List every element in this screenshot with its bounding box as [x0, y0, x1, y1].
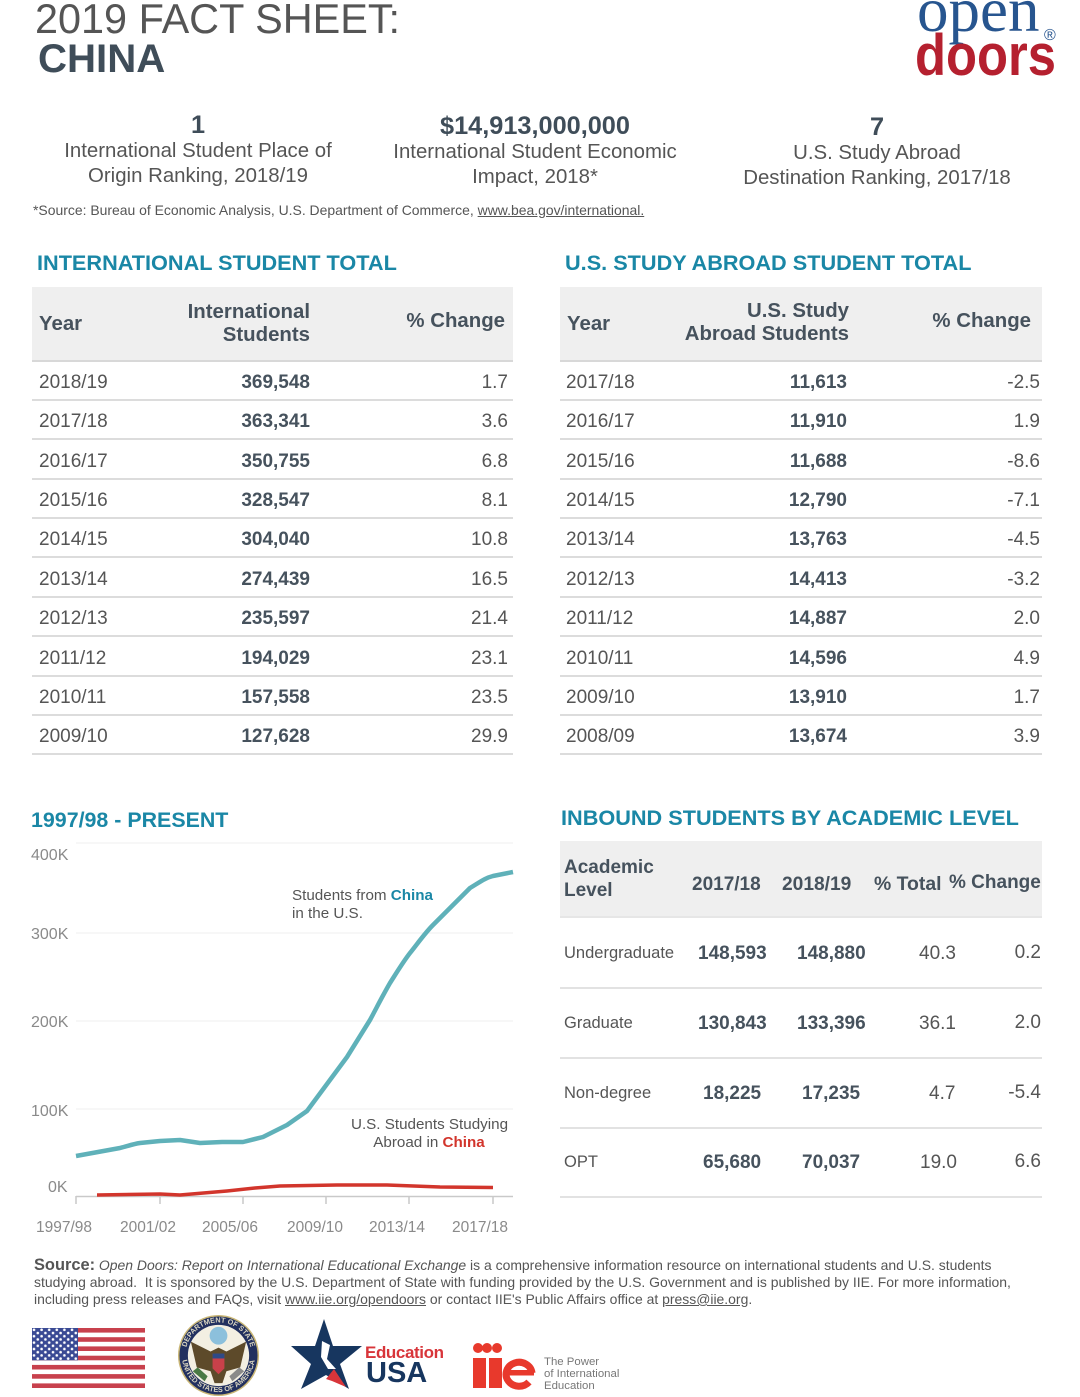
row 2009/10: 13,910: [789, 686, 847, 708]
table header: % Total: [874, 873, 942, 895]
x axis labels: 2013/14: [369, 1219, 425, 1236]
row OPT: 70,037: [802, 1152, 860, 1173]
row 2013/14: 16.5: [471, 568, 508, 590]
logo text: EducationUSA: [365, 1343, 444, 1389]
row non-degree: [560, 1058, 1042, 1128]
row 2016/17: [32, 440, 513, 480]
row 2011/12: 2011/12: [39, 648, 106, 668]
icon: Department of State seal: DEPARTMENT OF STATE: [182, 1317, 256, 1348]
row 2015/16: 8.1: [482, 490, 508, 511]
stat: study abroad ranking: 7: [870, 113, 884, 141]
row 2014/15: 2014/15: [39, 529, 108, 550]
row undergraduate: 0.2: [1015, 942, 1041, 963]
row undergraduate: 148,880: [797, 943, 866, 964]
y axis labels: 0K: [48, 1179, 68, 1196]
row graduate: 36.1: [919, 1012, 956, 1034]
row 2010/11: 4.9: [1014, 648, 1040, 668]
row 2009/10: 29.9: [471, 726, 508, 747]
row 2015/16: -8.6: [1007, 450, 1040, 472]
row 2018/19: [32, 362, 513, 401]
IIE tagline: of International: [544, 1368, 619, 1380]
row 2015/16: [32, 480, 513, 519]
row 2011/12: 2011/12: [566, 608, 633, 629]
row 2012/13: 2012/13: [39, 608, 108, 629]
row graduate: [560, 988, 1042, 1058]
table header: Academic: [564, 857, 654, 878]
source text: [34, 1256, 1011, 1307]
row 2012/13: 235,597: [241, 608, 310, 629]
row OPT: [560, 1128, 1042, 1198]
icon: Department of State seal: [178, 1315, 259, 1396]
table header: Students: [223, 324, 310, 346]
label: students from China: in the U.S.: [292, 905, 363, 922]
row graduate: 133,396: [797, 1012, 866, 1034]
row 2017/18: [560, 362, 1042, 401]
row 2016/17: 2016/17: [566, 411, 635, 432]
row OPT: 6.6: [1015, 1151, 1041, 1172]
row 2014/15: -7.1: [1007, 490, 1040, 511]
stat: economic impact: International Student Economic: [393, 141, 677, 163]
row 2013/14: 13,763: [789, 529, 847, 550]
row undergraduate: Undergraduate: [564, 944, 674, 962]
source note: *Source: Bureau of Economic Analysis, U.S. Department of Commerce, www.bea.gov/international.: [33, 202, 644, 218]
row 2018/19: 1.7: [482, 372, 508, 393]
table header: Level: [564, 880, 613, 900]
row 2008/09: 2008/09: [566, 726, 635, 747]
table header: [560, 287, 1042, 362]
row undergraduate: 40.3: [919, 943, 956, 964]
stat: economic impact: Impact, 2018*: [472, 166, 598, 188]
row 2015/16: 328,547: [241, 490, 310, 511]
row 2016/17: 6.8: [482, 450, 508, 472]
row 2017/18: -2.5: [1007, 372, 1040, 393]
table header: % Change: [932, 310, 1031, 332]
row 2012/13: 14,413: [789, 568, 847, 590]
icon: EducationUSA star: [291, 1319, 362, 1389]
logo text: EducationUSA: USA: [366, 1357, 427, 1389]
row 2011/12: [32, 638, 513, 676]
x axis labels: 2001/02: [120, 1219, 176, 1236]
row non-degree: -5.4: [1008, 1082, 1041, 1102]
row 2014/15: 2014/15: [566, 490, 635, 511]
row 2013/14: 2013/14: [566, 529, 635, 550]
table: academic level: [560, 841, 1042, 918]
logo: IIE: [473, 1343, 619, 1392]
row 2018/19: 2018/19: [39, 372, 108, 393]
row undergraduate: 148,593: [698, 943, 767, 964]
heading: study abroad total: U.S. STUDY ABROAD STUDENT TOTAL: [565, 250, 971, 275]
label: U.S. students abroad: Abroad in China: [373, 1134, 485, 1151]
row OPT: OPT: [564, 1153, 598, 1171]
row 2017/18: 2017/18: [39, 411, 108, 432]
row 2009/10: 2009/10: [566, 686, 635, 708]
row 2016/17: 11,910: [790, 411, 847, 432]
row 2010/11: 157,558: [241, 686, 310, 708]
label: students from China: [292, 887, 434, 922]
row 2010/11: 23.5: [471, 686, 508, 708]
IIE tagline: Education: [544, 1380, 595, 1392]
title: CHINA: [38, 36, 165, 81]
row 2010/11: 2010/11: [39, 686, 106, 708]
stat: place of origin ranking: 1: [191, 111, 205, 139]
row 2013/14: [32, 558, 513, 598]
row undergraduate: [560, 919, 1042, 989]
stat: study abroad ranking: Destination Ranking, 2017/18: [743, 166, 1011, 188]
row 2012/13: -3.2: [1007, 568, 1040, 590]
row 2010/11: 14,596: [789, 648, 847, 668]
row 2013/14: 2013/14: [39, 568, 108, 590]
table header: % Change: [406, 310, 505, 332]
row 2015/16: [560, 440, 1042, 480]
row non-degree: Non-degree: [564, 1084, 651, 1102]
row 2015/16: 2015/16: [566, 450, 635, 472]
row 2013/14: -4.5: [1007, 529, 1040, 550]
table header: [32, 287, 513, 362]
table header: % Change: [949, 872, 1041, 893]
stat: place of origin ranking: [64, 111, 332, 186]
row 2017/18: 11,613: [790, 372, 847, 393]
x axis labels: 2017/18: [452, 1219, 508, 1236]
stat: place of origin ranking: International Student Place of: [64, 140, 332, 162]
row graduate: Graduate: [564, 1014, 633, 1032]
row 2016/17: 2016/17: [39, 450, 108, 472]
heading: inbound students by academic level: INBOUND STUDENTS BY ACADEMIC LEVEL: [561, 805, 1019, 830]
row 2016/17: 1.9: [1014, 411, 1040, 432]
table header: Year: [567, 313, 610, 335]
heading: international student total: INTERNATIONAL STUDENT TOTAL: [37, 250, 397, 275]
label: U.S. students abroad: [351, 1116, 508, 1151]
row 2017/18: [32, 401, 513, 440]
stat: economic impact: $14,913,000,000: [440, 112, 630, 140]
row 2012/13: [32, 598, 513, 637]
line: students from China: [76, 872, 513, 1156]
x axis labels: 2005/06: [202, 1219, 258, 1236]
row 2009/10: 1.7: [1014, 686, 1040, 708]
icon: Department of State seal: UNITED STATES OF AMERICA: [182, 1360, 255, 1392]
row 2017/18: 2017/18: [566, 372, 635, 393]
IIE mark: [473, 1343, 536, 1390]
row 2012/13: 21.4: [471, 608, 508, 629]
row 2014/15: 10.8: [471, 529, 508, 550]
table header: International: [188, 301, 310, 323]
row graduate: 130,843: [698, 1012, 767, 1034]
row 2018/19: 369,548: [241, 372, 310, 393]
row 2011/12: 194,029: [241, 648, 310, 668]
row 2011/12: [560, 598, 1042, 637]
y axis labels: [31, 847, 69, 1196]
row 2017/18: 3.6: [482, 411, 508, 432]
row 2008/09: [560, 716, 1042, 755]
row 2009/10: 2009/10: [39, 726, 108, 747]
row non-degree: 18,225: [703, 1082, 761, 1104]
x axis labels: 2009/10: [287, 1219, 343, 1236]
y axis labels: 200K: [31, 1014, 69, 1031]
logo: open doors: ®: [1044, 27, 1056, 44]
row 2012/13: 2012/13: [566, 568, 635, 590]
row 2009/10: 127,628: [241, 726, 310, 747]
line: U.S. students in China: [97, 1185, 493, 1195]
label: U.S. students abroad: U.S. Students Studying: [351, 1116, 508, 1133]
label: students from China: Students from China: [292, 887, 434, 904]
row 2015/16: 11,688: [790, 450, 847, 472]
IIE tagline: [544, 1356, 619, 1392]
row 2009/10: [32, 716, 513, 755]
row OPT: 65,680: [703, 1152, 761, 1173]
source text: studying abroad. It is sponsored by the U.S. Department of State with funding provided by the U.S. Government and is published by IIE. For more information,: [34, 1274, 1011, 1290]
row 2015/16: 2015/16: [39, 490, 108, 511]
row 2016/17: [560, 401, 1042, 440]
table header: U.S. Study: [747, 300, 849, 322]
stat: place of origin ranking: Origin Ranking, 2018/19: [88, 164, 308, 186]
logo: open doors: doors: [915, 23, 1056, 88]
row 2016/17: 350,755: [241, 450, 310, 472]
table header: 2017/18: [692, 874, 761, 895]
row 2014/15: [32, 519, 513, 558]
IIE tagline: The Power: [544, 1356, 599, 1368]
row 2011/12: 2.0: [1014, 608, 1040, 629]
x axis labels: 1997/98: [36, 1219, 92, 1236]
row 2014/15: [560, 480, 1042, 519]
line chart: [31, 842, 514, 1236]
row 2014/15: 304,040: [241, 529, 310, 550]
row 2013/14: [560, 519, 1042, 558]
table: study abroad students: [560, 287, 1042, 755]
source text: including press releases and FAQs, visit www.iie.org/opendoors or contact IIE's Public Affairs office at press@iie.org.: [34, 1291, 752, 1307]
row 2013/14: 274,439: [241, 568, 310, 590]
logo text: EducationUSA: Education: [365, 1343, 444, 1362]
x axis labels: [36, 1219, 508, 1236]
table: international students: [32, 287, 513, 755]
row 2014/15: 12,790: [789, 490, 847, 511]
row 2010/11: [560, 638, 1042, 676]
table header: Abroad Students: [685, 323, 849, 345]
table header: 2018/19: [782, 874, 851, 895]
row non-degree: 17,235: [802, 1082, 860, 1104]
x axis: [76, 1196, 513, 1204]
table header: [560, 841, 1042, 918]
row 2008/09: 3.9: [1014, 726, 1040, 747]
row 2009/10: [560, 676, 1042, 716]
row 2010/11: [32, 676, 513, 716]
table header: Year: [39, 313, 82, 335]
stat: study abroad ranking: [743, 113, 1011, 188]
icon: US flag: [32, 1328, 145, 1388]
row 2017/18: 363,341: [241, 411, 310, 432]
stat: economic impact: [393, 112, 677, 188]
row 2008/09: 13,674: [789, 726, 847, 747]
row 2010/11: 2010/11: [566, 648, 633, 668]
heading: 1997/98 to present: 1997/98 - PRESENT: [31, 808, 228, 832]
row non-degree: 4.7: [929, 1082, 955, 1104]
stat: study abroad ranking: U.S. Study Abroad: [793, 142, 961, 164]
source text: Source: Open Doors: Report on International Educational Exchange is a comprehensive information resource on international students and U.S. students: [34, 1256, 991, 1274]
row 2011/12: 23.1: [471, 648, 508, 668]
row 2011/12: 14,887: [789, 608, 847, 629]
row graduate: 2.0: [1015, 1012, 1041, 1032]
row 2012/13: [560, 558, 1042, 598]
y axis labels: 100K: [31, 1103, 69, 1120]
row OPT: 19.0: [920, 1152, 957, 1173]
y axis labels: 300K: [31, 926, 69, 943]
y axis labels: 400K: [31, 847, 69, 864]
title: [35, 0, 400, 81]
